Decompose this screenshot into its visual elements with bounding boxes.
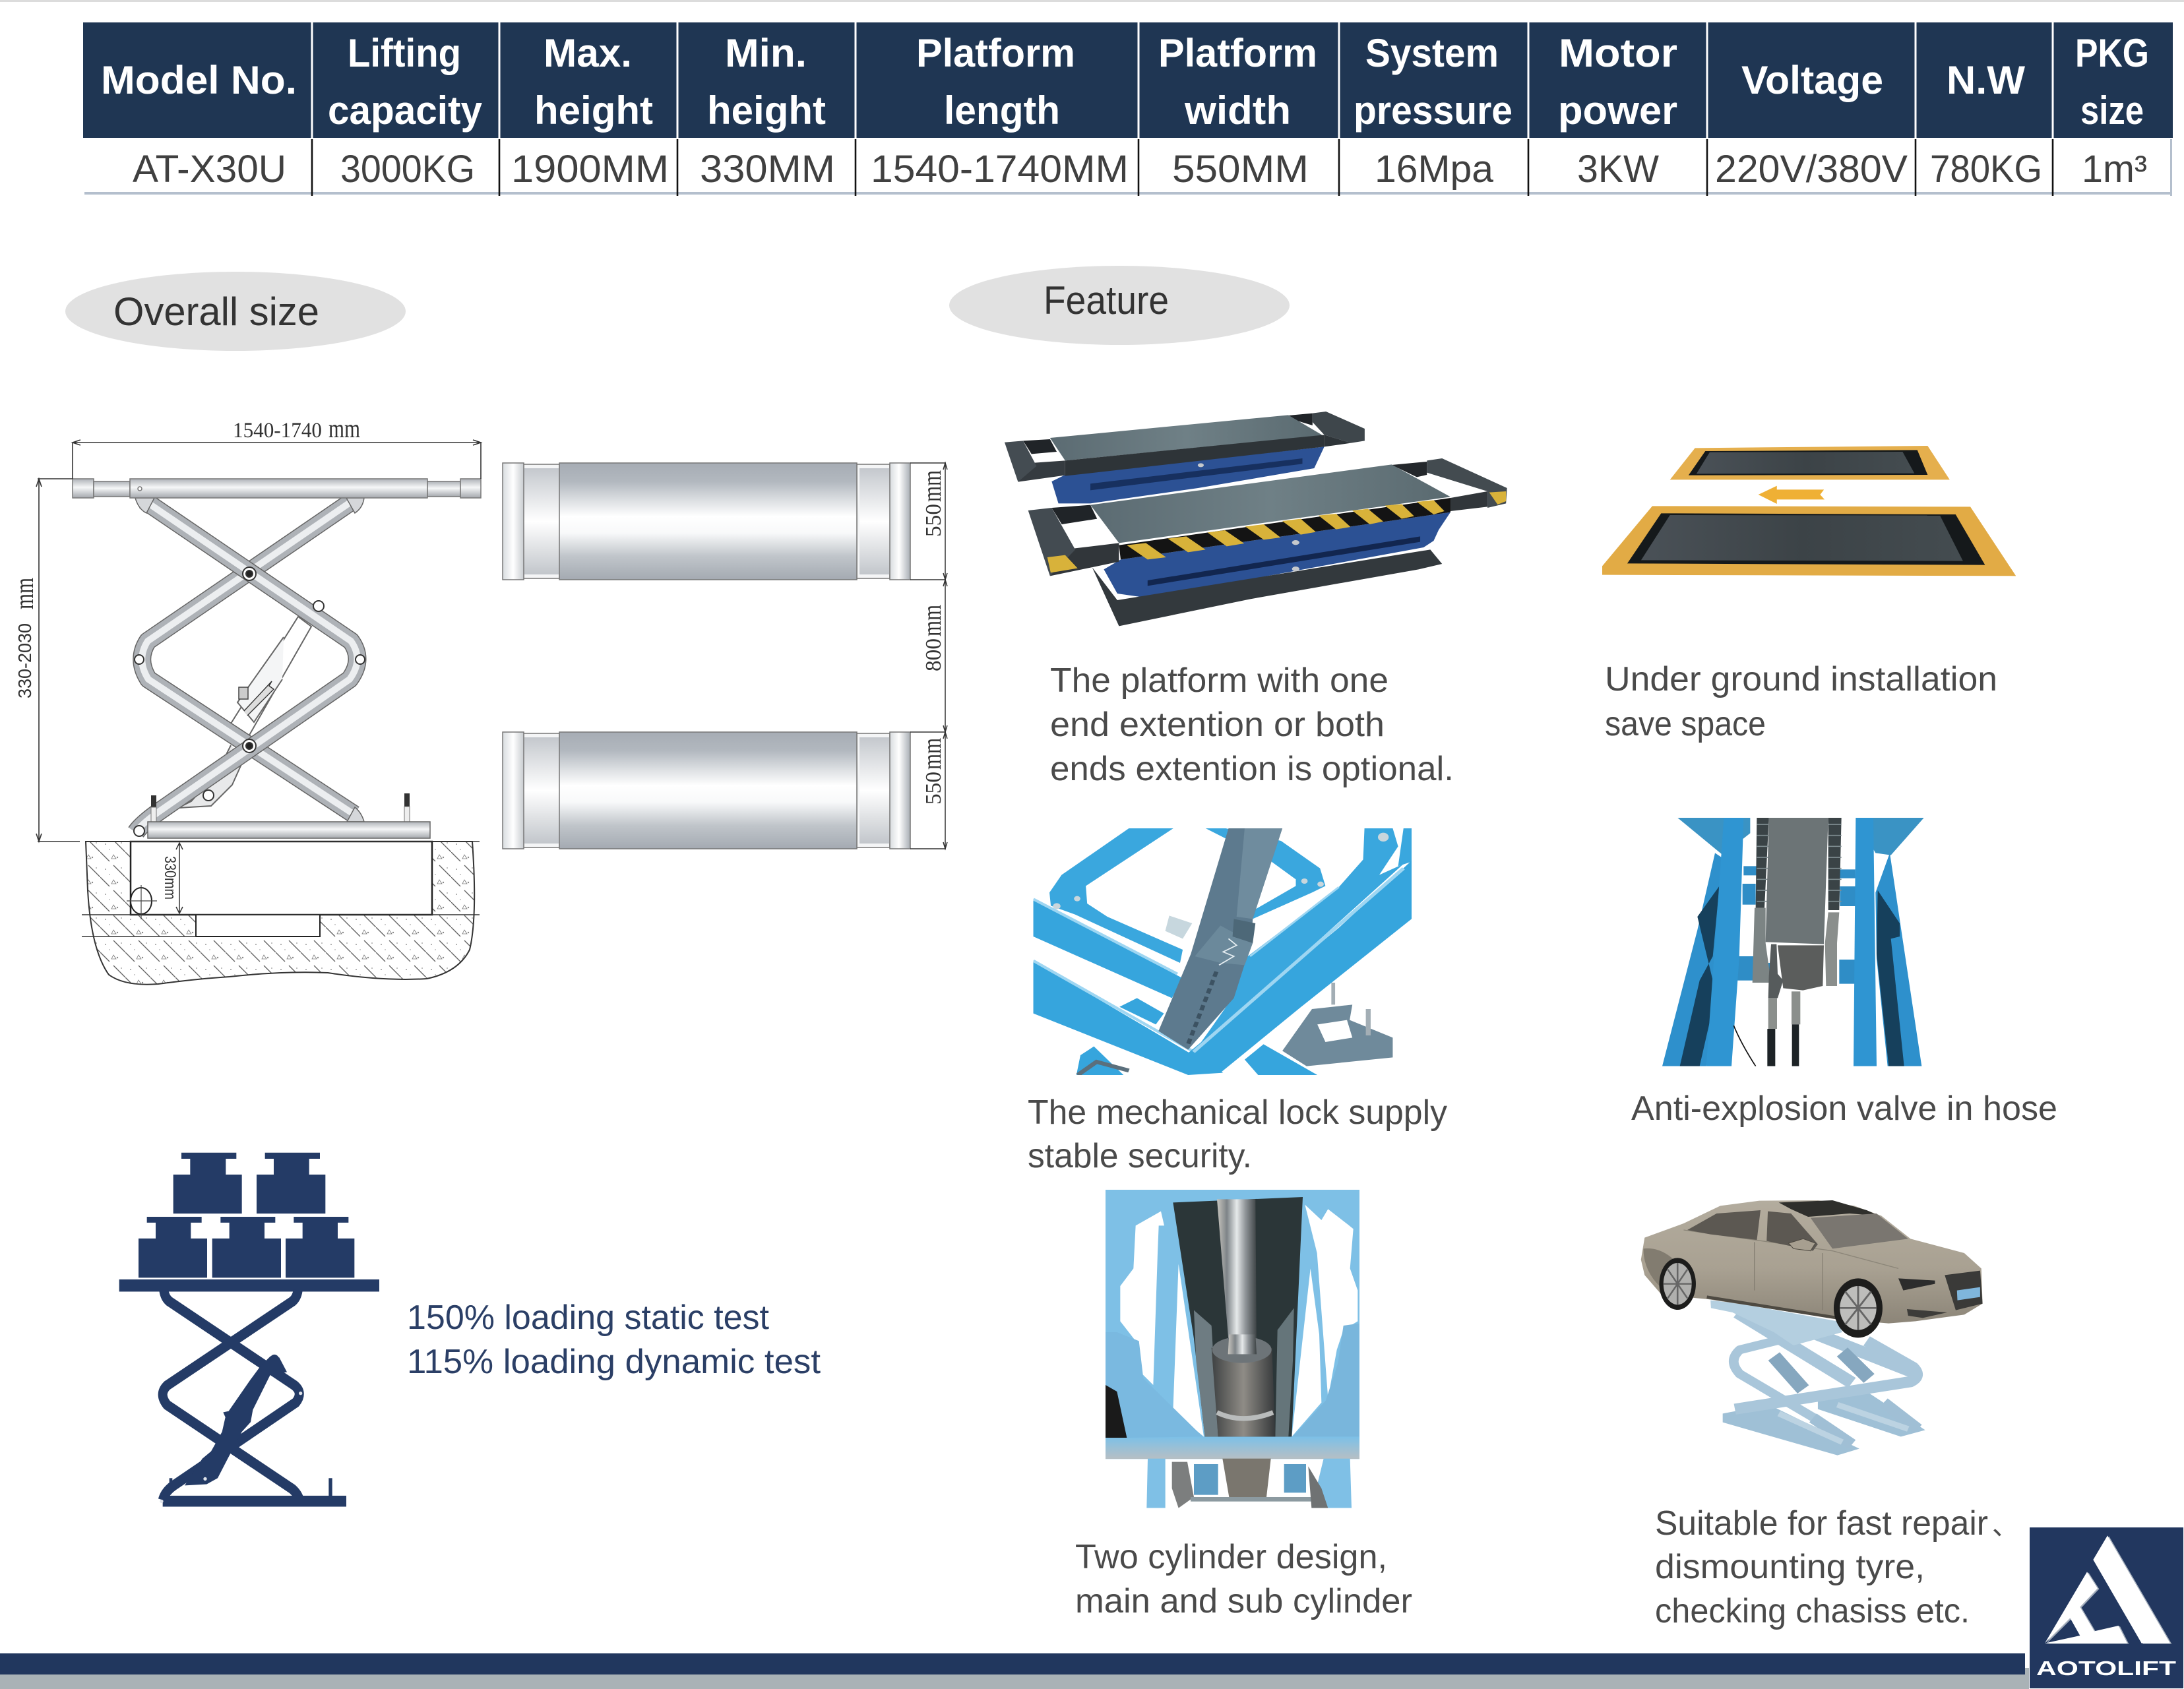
icon: load test weights on scissor lift bbox=[119, 1153, 379, 1507]
data values: AT-X30U bbox=[133, 148, 286, 191]
data values: 1540-1740MM bbox=[871, 148, 1129, 191]
header labels: PKG bbox=[2075, 31, 2149, 75]
upper weights bbox=[173, 1153, 325, 1213]
table header band bbox=[83, 22, 2173, 138]
pivot bolts bbox=[1053, 833, 1388, 909]
load platform bbox=[119, 1279, 379, 1291]
arm top brackets bbox=[135, 498, 364, 822]
header labels: N.W bbox=[1947, 58, 2025, 102]
rear scissor arms bbox=[1049, 828, 1412, 1053]
heading: overall size bbox=[65, 272, 406, 351]
wheels bbox=[1659, 1258, 1883, 1337]
scissor lift bbox=[1710, 1301, 1925, 1456]
caption: underground installation bbox=[1605, 660, 1997, 743]
piston rod bbox=[1217, 1199, 1257, 1347]
width dimensions: 550 bbox=[921, 772, 946, 805]
scissor silhouette bbox=[163, 1291, 299, 1500]
logo: Aotolift bbox=[2030, 1527, 2183, 1688]
header labels: Lifting bbox=[348, 31, 461, 75]
data values: 16Mpa bbox=[1375, 148, 1494, 191]
lower side gussets bbox=[1106, 1332, 1202, 1438]
caption: load test bbox=[407, 1299, 821, 1381]
front pit bbox=[1602, 506, 2016, 576]
photo: anti-explosion valve bbox=[1662, 818, 1924, 1066]
base rail bbox=[163, 1496, 346, 1507]
data values: 220V/380V bbox=[1715, 148, 1908, 191]
header labels: power bbox=[1558, 88, 1677, 133]
lower platform bbox=[503, 732, 910, 849]
concrete pit section bbox=[82, 842, 480, 985]
photo: mechanical lock bbox=[1034, 828, 1412, 1075]
caption: mechanical lock: The mechanical lock supply bbox=[1028, 1093, 1447, 1132]
header labels: Voltage bbox=[1741, 58, 1883, 102]
photo: car on scissor lift bbox=[1641, 1200, 1983, 1456]
valve and hoses bbox=[1733, 944, 1800, 1066]
direction arrow bbox=[1759, 486, 1825, 504]
photo: lift with platform extensions bbox=[1005, 412, 1507, 626]
table right edge bbox=[2170, 139, 2172, 196]
car body bbox=[1641, 1200, 1983, 1337]
header labels: height bbox=[534, 88, 653, 133]
data row dividers bbox=[312, 139, 2053, 196]
front scissor arms bbox=[1034, 899, 1317, 1075]
caption: two cylinder design bbox=[1075, 1538, 1412, 1620]
logo shadow bbox=[2046, 1536, 2171, 1644]
pin holes bbox=[160, 1392, 302, 1503]
ratchet column bbox=[1158, 828, 1282, 1050]
caption: platform extension: ends extention is optional. bbox=[1050, 750, 1454, 788]
caption: underground installation: Under ground installation bbox=[1605, 660, 1997, 698]
footer bar bbox=[0, 1653, 2029, 1689]
caption: suitable uses: checking chasiss etc. bbox=[1655, 1592, 1970, 1630]
header labels: System bbox=[1365, 31, 1499, 75]
side elevation drawing of lift bbox=[9, 414, 481, 985]
width dimensions: mm bbox=[917, 738, 947, 770]
header labels: Motor bbox=[1559, 31, 1677, 75]
caption: suitable uses: 、 bbox=[1992, 1512, 2018, 1541]
window openings bbox=[1120, 1205, 1357, 1436]
data values: 330MM bbox=[700, 148, 835, 191]
top edge strip bbox=[0, 0, 2184, 2]
header labels: width bbox=[1184, 88, 1291, 133]
header labels: length bbox=[944, 88, 1060, 133]
height dimension: mm bbox=[9, 578, 39, 609]
data values: 3000KG bbox=[340, 148, 475, 191]
caption: two cylinder design: Two cylinder design, bbox=[1075, 1538, 1387, 1576]
caption: underground installation: save space bbox=[1605, 705, 1766, 743]
header column dividers bbox=[312, 22, 2053, 138]
upper platform bbox=[503, 463, 910, 580]
safety pins on base bbox=[151, 793, 410, 822]
back lift bbox=[1005, 412, 1365, 503]
width dimensions: mm bbox=[917, 605, 947, 636]
base frame bbox=[148, 822, 430, 838]
dark centre bbox=[1173, 1197, 1303, 1436]
photo: underground installation bbox=[1602, 446, 2016, 576]
heading: feature: Feature bbox=[1044, 278, 1169, 322]
front lift bbox=[1028, 458, 1507, 626]
scissor arms bbox=[135, 498, 364, 832]
cylinder silhouette bbox=[170, 1355, 332, 1498]
cross beam bbox=[1106, 1438, 1359, 1459]
caption: suitable uses bbox=[1655, 1504, 2018, 1630]
height dimension bbox=[9, 479, 80, 842]
pivot pins bbox=[134, 567, 365, 836]
data values: 1m³ bbox=[2082, 148, 2147, 191]
front details bbox=[1898, 1271, 1983, 1318]
rear pit bbox=[1670, 446, 1950, 479]
width dimensions bbox=[910, 463, 947, 849]
caption: suitable uses: dismounting tyre, bbox=[1655, 1548, 1925, 1586]
width dimensions: 800 bbox=[921, 638, 946, 671]
lift cylinder and ratchet bbox=[178, 608, 336, 808]
length dimension: mm bbox=[328, 414, 360, 443]
header labels: pressure bbox=[1354, 88, 1513, 133]
caption: load test: 150% loading static test bbox=[407, 1299, 770, 1337]
data values: 1900MM bbox=[511, 148, 669, 191]
width dimensions: mm bbox=[917, 470, 947, 502]
windows bbox=[1687, 1210, 1908, 1251]
heading: overall size: Overall size bbox=[113, 290, 319, 334]
base rail bbox=[1282, 1004, 1392, 1066]
header labels: Max. bbox=[544, 31, 632, 75]
heading: feature bbox=[949, 266, 1290, 345]
caption: mechanical lock bbox=[1028, 1093, 1447, 1175]
caption: platform extension: The platform with one bbox=[1050, 661, 1388, 700]
main columns bbox=[1706, 818, 1877, 1066]
logo mark bbox=[2045, 1535, 2170, 1643]
table data row rule bbox=[84, 192, 2172, 195]
length dimension: 1540-1740 bbox=[233, 419, 322, 443]
caption: platform extension bbox=[1050, 661, 1454, 788]
caption: anti-explosion valve: Anti-explosion valve in hose bbox=[1631, 1090, 2057, 1128]
main diagonal arm bbox=[1188, 861, 1412, 1073]
specification table bbox=[83, 22, 2173, 196]
photo: two cylinder design bbox=[1106, 1190, 1359, 1508]
cross tubes bbox=[1733, 866, 1856, 984]
caption: mechanical lock: stable security. bbox=[1028, 1137, 1252, 1175]
header labels bbox=[101, 31, 2149, 133]
header labels: Platform bbox=[916, 31, 1075, 75]
header labels: size bbox=[2080, 88, 2144, 133]
cylinder barrel bbox=[1212, 1347, 1275, 1436]
outer legs bbox=[1662, 818, 1924, 1066]
caption: platform extension: end extention or both bbox=[1050, 706, 1385, 744]
clevis plates bbox=[1753, 908, 1771, 983]
blue frame bbox=[1106, 1190, 1359, 1459]
lower weights bbox=[139, 1217, 354, 1277]
header labels: Model No. bbox=[101, 58, 297, 102]
concrete pit section: 330mm bbox=[161, 856, 179, 900]
platform side view bbox=[73, 479, 481, 498]
width dimensions: 550 bbox=[921, 504, 946, 537]
data values bbox=[133, 148, 2147, 191]
data values: 3KW bbox=[1577, 148, 1659, 191]
header labels: Min. bbox=[725, 31, 807, 75]
data values: 550MM bbox=[1172, 148, 1309, 191]
header labels: Platform bbox=[1158, 31, 1317, 75]
header labels: capacity bbox=[328, 88, 483, 133]
caption: two cylinder design: main and sub cylinder bbox=[1075, 1582, 1412, 1620]
cylinder housing bbox=[1766, 818, 1828, 944]
logo wordmark: AOTOLIFT bbox=[2036, 1657, 2176, 1680]
header labels: height bbox=[707, 88, 826, 133]
caption: load test: 115% loading dynamic test bbox=[407, 1343, 821, 1381]
top view drawing of platforms bbox=[503, 463, 947, 849]
lower legs and cylinder end bbox=[1106, 1459, 1359, 1508]
data values: 780KG bbox=[1930, 148, 2042, 191]
roof bbox=[1779, 1200, 1879, 1217]
safety stripes bbox=[1127, 500, 1445, 559]
height dimension: 330-2030 bbox=[15, 623, 35, 698]
ratchet racks bbox=[1756, 818, 1842, 910]
door mirror bbox=[1789, 1239, 1815, 1251]
caption: suitable uses: Suitable for fast repair bbox=[1655, 1504, 1988, 1543]
length dimension bbox=[73, 414, 481, 479]
